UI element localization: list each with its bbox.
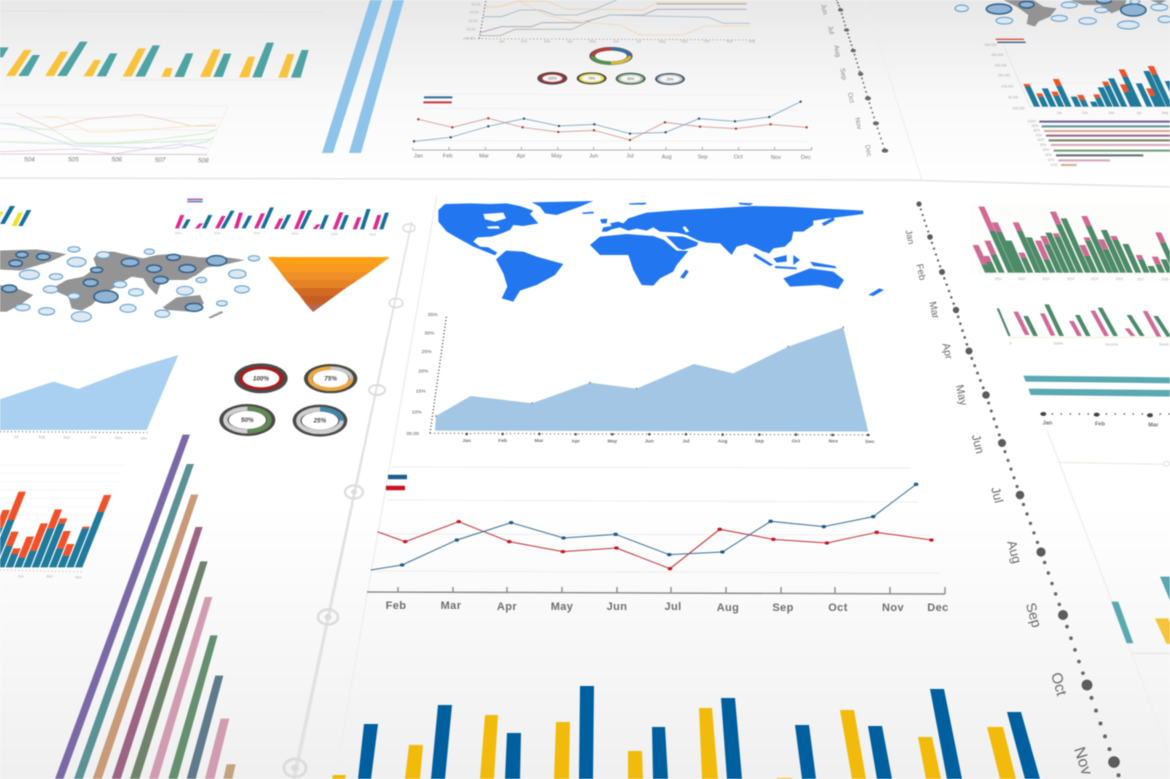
panel: top-right horizontal bars: 20%	[1048, 158, 1054, 162]
panel: top-left pale multi-line chart: 505	[68, 156, 79, 163]
panel: top-right stacked teal and red bar chart: Apr	[1137, 111, 1143, 115]
panel: right green and pink stacked bars: 2012	[1018, 277, 1026, 281]
panel: top-centre multi-line chart: 15.00	[468, 19, 477, 23]
legend swatches	[386, 477, 407, 488]
timeline: top-right months with dots: Nov	[853, 117, 863, 131]
panel: left light-blue area chart: Oct	[90, 436, 96, 440]
panel: top-right horizontal bars	[1027, 119, 1170, 167]
panel: left small pink and blue bar chart: 2011	[175, 231, 182, 235]
panel: top-right horizontal bars: 90%	[1032, 124, 1038, 128]
small cropped bars at far left	[0, 206, 31, 226]
panel: central blue area chart: 20%	[418, 369, 429, 375]
panel: central two-line chart	[367, 467, 949, 614]
panel: central blue area chart: Oct	[792, 439, 800, 445]
panel: central blue area chart: 30%	[424, 330, 435, 336]
panel: bottom-right partial bars	[1058, 461, 1170, 653]
red series	[377, 520, 934, 570]
timeline: right months with dots: Feb	[913, 263, 928, 281]
panel: central blue world map	[438, 201, 884, 302]
Iceland and arctic islands	[582, 203, 753, 223]
panel: top-centre multi-line chart: Aug	[659, 40, 665, 44]
panel: top-centre two-line chart: Jul	[626, 154, 634, 160]
panel: top-right stacked teal and red bar chart: May	[1162, 111, 1168, 115]
panel: left stacked teal and red bar chart: Dec	[75, 575, 82, 579]
x axis: Jun	[607, 601, 627, 613]
panel: left small pink and blue bar chart: 2016	[369, 232, 376, 236]
timeline: right months with dots: Oct	[1047, 671, 1070, 698]
Japan	[822, 217, 835, 226]
donuts: top-centre row of four rings: 75%	[588, 77, 595, 81]
donuts: top-centre row of four rings: 50%	[627, 77, 634, 81]
panel: top-centre two-line chart: May	[551, 154, 562, 160]
panel: right green and pink stacked bars: 2015	[1091, 277, 1099, 281]
timeline: top-right months with dots: Sep	[838, 68, 848, 81]
panel: top-centre two-line chart: Apr	[517, 154, 526, 160]
timeline: right months with dots: Sep	[1023, 601, 1045, 629]
panel: top-right horizontal bars: 30%	[1045, 153, 1052, 157]
donuts: top-centre row of four rings: 25%	[667, 77, 673, 81]
panel: top-right stacked teal and red bar chart: 300.000	[995, 63, 1007, 67]
panel: top-right stacked teal and red bar chart: 200.000	[998, 74, 1010, 78]
panel: top-left yellow and teal bar chart	[0, 11, 323, 80]
panel: top-right horizontal bars: 40%	[1043, 148, 1049, 152]
Arabia	[666, 236, 698, 250]
panel: left light-blue area chart: Aug	[38, 435, 45, 439]
panel: central blue area chart: May	[607, 438, 617, 444]
timeline: top-right months with dots: Oct	[846, 92, 855, 104]
panel: top-right dotted map with blue markers	[955, 0, 1170, 29]
timeline: right months with dots: Nov	[1070, 745, 1095, 777]
timeline: right months with dots: May	[953, 384, 969, 407]
panel: central blue area chart: Dec	[865, 439, 875, 445]
panel: left small pink and blue bar chart: 2012	[214, 231, 221, 235]
panel: right green and pink stacked bars: 2016	[1116, 277, 1123, 281]
donut: 75%: 75%	[324, 376, 337, 383]
panel: right teal bars and mini timeline: Feb	[1095, 422, 1106, 428]
x axis: Aug	[717, 602, 739, 614]
panel: top-centre two-line chart: Feb	[443, 153, 453, 159]
panel: top-centre multi-line chart: Jan	[499, 39, 505, 43]
donut: 100%: 100%	[253, 375, 269, 382]
panel: top-centre two-line chart	[413, 94, 812, 161]
panel: top-centre multi-line chart: Oct	[704, 40, 709, 44]
panel: top-right horizontal bars: 70%	[1035, 133, 1042, 137]
panel: right green and pink stacked bars: 2018	[1161, 278, 1169, 282]
panel: central blue area chart: Jan	[462, 438, 471, 444]
North America	[438, 203, 538, 255]
panel: top-centre multi-line chart: 00.00	[465, 36, 474, 40]
panel: central blue area chart: Nov	[829, 439, 838, 445]
panel: top-centre multi-line chart: Jul	[636, 39, 641, 43]
x axis: Nov	[882, 602, 904, 614]
panel: top-left pale multi-line chart: 504	[24, 156, 35, 163]
panel: top-centre two-line chart: Oct	[734, 155, 743, 161]
Australia	[783, 268, 844, 289]
panel: top-right stacked teal and red bar chart: Mar	[1109, 111, 1115, 115]
Africa	[590, 234, 688, 286]
New Zealand	[868, 288, 884, 296]
panel: right teal bars and mini timeline: Mar	[1148, 422, 1159, 428]
panel: central blue area chart: 00.00	[406, 431, 419, 437]
panel: top-left pale multi-line chart: 507	[155, 157, 166, 164]
panel: top-centre multi-line chart: May	[589, 39, 596, 43]
panel: top-centre multi-line chart: Apr	[567, 39, 574, 43]
panel: top-right stacked teal and red bar chart: 500.000	[985, 43, 997, 47]
panel: top-centre multi-line chart: 25.00	[471, 2, 481, 6]
panel: bottom blue and yellow bar chart	[332, 686, 1040, 779]
donut: 50%: 50%	[241, 417, 254, 424]
donuts: top-centre row of four rings	[537, 72, 685, 85]
timeline: top-right months with dots: Aug	[832, 45, 842, 58]
panel: left stacked teal and red bar chart: Nov	[46, 575, 53, 579]
panel: top-right stacked teal and red bar chart: 100.000	[1001, 84, 1013, 88]
panel: top-centre two-line chart: Dec	[801, 155, 811, 161]
panel: top-centre two-line chart: Jan	[414, 153, 423, 159]
x axis: Feb	[386, 600, 406, 612]
panel: central blue area chart: 25%	[422, 349, 432, 355]
panel: top-centre two-line chart: Mar	[479, 153, 489, 159]
panel: top-right horizontal bars: 100%	[1027, 119, 1036, 123]
panel: top-centre multi-line chart: Mar	[544, 39, 551, 43]
panel: right paired green and pink bars: Stock	[1159, 342, 1169, 347]
panel: left light-blue area chart	[0, 355, 178, 441]
panel: top-right stacked teal and red bar chart: Feb	[1082, 111, 1088, 115]
donut: 75%	[304, 364, 357, 393]
panel: central blue area chart: Apr	[571, 438, 580, 444]
panel: top-right horizontal bars: 50%	[1040, 143, 1047, 147]
donuts: top-centre row of four rings: 100%	[548, 77, 557, 81]
timeline: right months with dots: Apr	[939, 342, 955, 361]
panel: central blue area chart: Sep	[755, 439, 764, 445]
chart: large diagonal multicolour bars	[55, 435, 236, 779]
panel: top-centre two-line chart: Sep	[698, 154, 708, 160]
timeline: right months with dots: Jun	[969, 433, 987, 455]
panel: left light-blue area chart: Dec	[141, 437, 147, 441]
panel: right green and pink stacked bars: 2014	[1067, 277, 1075, 281]
panel: top-right stacked teal and red bar chart: 50.000	[1008, 95, 1019, 99]
timeline: right months with dots: Jul	[988, 486, 1006, 504]
panel: top-right stacked teal and red bar chart: Jan	[1057, 111, 1062, 115]
Eurasia	[602, 206, 863, 255]
panel: left small pink and blue bar chart	[0, 199, 389, 236]
timeline: right months with dots: Mar	[926, 301, 941, 320]
panel: right paired green and pink bars: Sales	[1053, 341, 1063, 346]
panel: central blue area chart: 35%	[428, 312, 438, 318]
panel: central blue area chart: 15%	[416, 389, 426, 395]
panel: top-centre two-line chart: Nov	[771, 155, 781, 161]
panel: top-right stacked teal and red bar chart	[985, 39, 1170, 115]
x axis: Mar	[441, 600, 462, 612]
panel: central blue area chart: Aug	[718, 439, 727, 445]
funnel chart	[268, 257, 390, 312]
panel: central blue area chart: Jul	[682, 438, 690, 444]
panel: right green and pink stacked bars: 2011	[995, 277, 1002, 281]
timeline: top-right months with dots: Jun	[819, 3, 828, 16]
panel: top-left pale multi-line chart: 508	[198, 157, 209, 164]
panel: left small pink and blue bar chart: 2014	[292, 231, 299, 235]
decorative blue diagonal stripes	[322, 0, 404, 153]
panel: central blue area chart: Feb	[498, 438, 507, 444]
panel: left light-blue area chart: Sep	[63, 435, 70, 439]
donut: top-centre multicolour ring	[589, 47, 633, 65]
timeline: top-right months with dots	[819, 0, 888, 158]
South-East Asia islands	[753, 253, 837, 269]
donut: 100%	[234, 363, 288, 393]
inland water cutouts	[474, 213, 689, 244]
panel: central blue area chart	[406, 312, 875, 445]
panel: central blue area chart: Jun	[645, 438, 654, 444]
panel: left dotted world map with blue markers	[0, 247, 260, 322]
panel: top-centre multi-line chart: Dec	[749, 40, 755, 44]
panel: top-right horizontal bars: 80%	[1033, 129, 1040, 133]
timeline: right months with dots	[904, 201, 1127, 779]
donut: 25%	[293, 405, 347, 437]
panel: central blue area chart: 10%	[412, 409, 422, 415]
panel: top-centre multi-line chart: Jun	[613, 39, 619, 43]
x axis: Dec	[927, 602, 949, 614]
timeline: gray vertical line with ring markers	[284, 222, 415, 779]
x axis: Apr	[497, 601, 517, 613]
blue series	[371, 483, 918, 570]
x axis: Sep	[772, 602, 794, 614]
panel: left small pink and blue bar chart: 2015	[331, 232, 338, 236]
panel: left light-blue area chart: Jul	[14, 435, 19, 439]
panel: top-centre multi-line chart: 10.00	[466, 28, 475, 32]
panel: right teal bars and mini timeline: Jan	[1042, 420, 1053, 426]
x axis: Oct	[828, 602, 848, 614]
timeline: top-right months with dots: Dec	[863, 144, 873, 158]
panel: left stacked teal and red bar chart: Oct	[18, 575, 24, 579]
x axis: May	[551, 601, 574, 613]
panel: right green and pink stacked bars	[955, 203, 1170, 282]
x axis: Jul	[664, 601, 682, 613]
panel: right paired green and pink bars: Income	[1105, 341, 1119, 346]
panel: left small pink and blue bar chart: 2013	[253, 231, 260, 235]
panel: top-centre multi-line chart: Nov	[726, 40, 733, 44]
Madagascar	[680, 269, 689, 279]
panel: top-centre multi-line chart: Sep	[681, 40, 688, 44]
panel: top-centre multi-line chart: Feb	[521, 39, 527, 43]
panel: top-left pale multi-line chart: 506	[111, 157, 122, 164]
x axis	[367, 587, 949, 614]
panel: left light-blue area chart: Nov	[115, 436, 122, 440]
panel: top-right horizontal bars: 60%	[1038, 138, 1044, 142]
panel: top-centre multi-line chart	[463, 0, 755, 44]
panel: right paired green and pink bars: 0	[1010, 341, 1013, 346]
panel: top-right horizontal bars: 10%	[1050, 163, 1057, 167]
panel: top-right stacked teal and red bar chart: 400.000	[991, 53, 1003, 57]
South America	[496, 251, 563, 302]
panel: right teal bars and mini timeline	[1023, 376, 1170, 428]
timeline: right months with dots: Jan	[904, 229, 916, 245]
panel: top-centre two-line chart: Aug	[662, 154, 672, 160]
panel: top-centre two-line chart: Jun	[589, 154, 598, 160]
panel: top-right stacked teal and red bar chart: 000.000	[1013, 107, 1025, 111]
panel: right paired green and pink bars	[997, 304, 1170, 347]
timeline: top-right months with dots: Jul	[826, 25, 835, 35]
Greenland	[532, 201, 593, 215]
panel: left stacked teal and red bar chart	[0, 465, 125, 579]
donut: 50%	[219, 404, 275, 436]
panel: right green and pink stacked bars: 2017	[1137, 278, 1144, 282]
donut: 25%: 25%	[313, 418, 327, 425]
panel: top-left pale multi-line chart	[0, 105, 228, 164]
panel: top-centre multi-line chart: 20.00	[469, 10, 479, 14]
panel: right green and pink stacked bars: 2013	[1042, 277, 1050, 281]
timeline: right months with dots: Aug	[1004, 539, 1025, 565]
panel: central blue area chart: Mar	[535, 438, 543, 444]
